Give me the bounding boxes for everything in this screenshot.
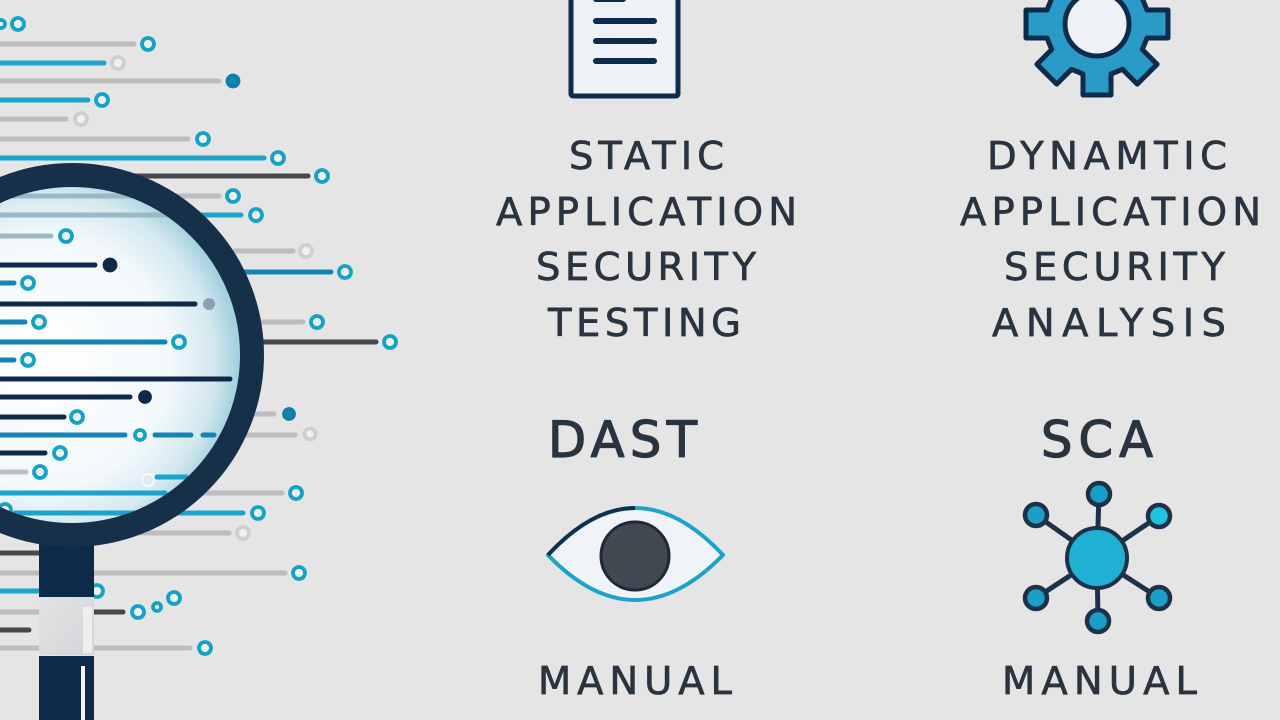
- lens frame: [0, 175, 252, 535]
- lines seen through the lens: [0, 196, 230, 516]
- icon: document: [571, 0, 678, 96]
- text block: static application security testing: STATIC: [569, 134, 724, 179]
- lens glass: [0, 183, 244, 527]
- text block: dynamic application security analysis: APPLICATION: [960, 190, 1261, 235]
- icon: gear: [1026, 0, 1168, 95]
- heading: DAST: DAST: [548, 411, 698, 469]
- end-point rings outside the lens: [0, 18, 396, 654]
- text block: dynamic application security analysis: DYNAMTIC: [987, 134, 1227, 179]
- text block: static application security testing: APPLICATION: [496, 190, 797, 235]
- text block: static application security testing: SECURITY: [536, 245, 756, 290]
- data lines outside the lens: [0, 44, 376, 648]
- label: manual left: MANUAL: [538, 659, 733, 704]
- text block: static application security testing: [496, 134, 797, 346]
- text block: dynamic application security analysis: ANALYSIS: [992, 301, 1226, 346]
- heading: SCA: SCA: [1041, 411, 1153, 469]
- icon: network: [1025, 483, 1170, 632]
- icon: eye: [548, 508, 723, 600]
- text block: dynamic application security analysis: [960, 134, 1261, 346]
- text block: dynamic application security analysis: SECURITY: [1004, 245, 1225, 290]
- handle: [39, 535, 94, 720]
- magnifying glass: [0, 175, 252, 720]
- label: manual right: MANUAL: [1002, 659, 1198, 704]
- text block: static application security testing: TESTING: [547, 301, 741, 346]
